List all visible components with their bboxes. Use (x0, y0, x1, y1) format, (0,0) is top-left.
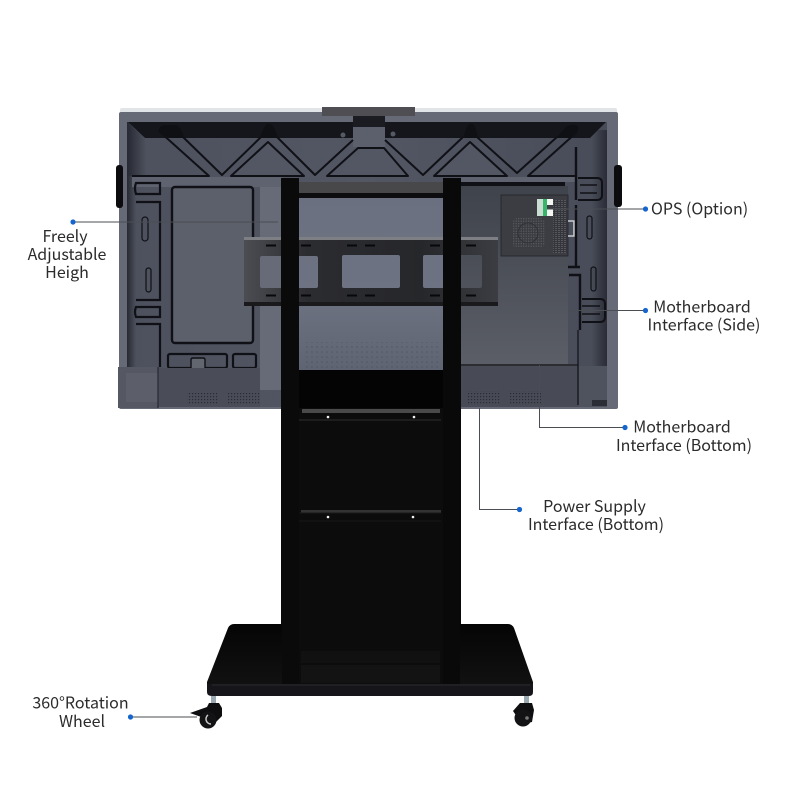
center panel (299, 182, 445, 409)
right caster wheel (513, 696, 534, 726)
callout: motherboard interface side (568, 294, 760, 336)
OPS module (501, 195, 574, 256)
callout: rotation wheel (32, 690, 197, 732)
right side channels and slots (568, 147, 605, 405)
callout: freely adjustable height: Freely (42, 223, 88, 247)
display back panel (116, 107, 622, 409)
bottom left cover (118, 367, 260, 408)
right handle (614, 165, 622, 207)
right metal cover (460, 182, 607, 407)
stand column (281, 178, 461, 684)
callout: power supply interface bottom (480, 408, 664, 535)
callout: power supply interface bottom: Interface (Bottom) (528, 511, 664, 535)
callout: OPS (547, 196, 748, 220)
mounting screws (327, 416, 415, 518)
left caster wheel (190, 696, 222, 728)
callout: motherboard interface side: Motherboard (653, 294, 751, 318)
callout: rotation wheel: Wheel (59, 708, 105, 732)
callout: motherboard interface bottom: Motherboard (633, 414, 731, 438)
wall mount plate (244, 237, 498, 306)
callout: freely adjustable height (28, 219, 278, 283)
upright posts (281, 178, 461, 684)
callout: power supply interface bottom: Power Supply (543, 493, 647, 517)
callout: OPS: OPS (Option) (651, 196, 748, 220)
callout: motherboard interface side: Interface (Side) (648, 312, 760, 336)
callout: motherboard interface bottom (540, 365, 752, 456)
callout: freely adjustable height: Heigh (45, 259, 89, 283)
camera bar (322, 107, 415, 116)
callout: motherboard interface bottom: Interface (Bottom) (616, 432, 752, 456)
left handle (116, 165, 123, 208)
left side channels and slots (135, 183, 256, 368)
silver hinge plate (260, 187, 282, 390)
mobile base (207, 624, 533, 696)
callout: freely adjustable height: Adjustable (28, 241, 107, 265)
top recessed channel (127, 116, 606, 187)
callout: rotation wheel: 360°Rotation (32, 690, 129, 714)
